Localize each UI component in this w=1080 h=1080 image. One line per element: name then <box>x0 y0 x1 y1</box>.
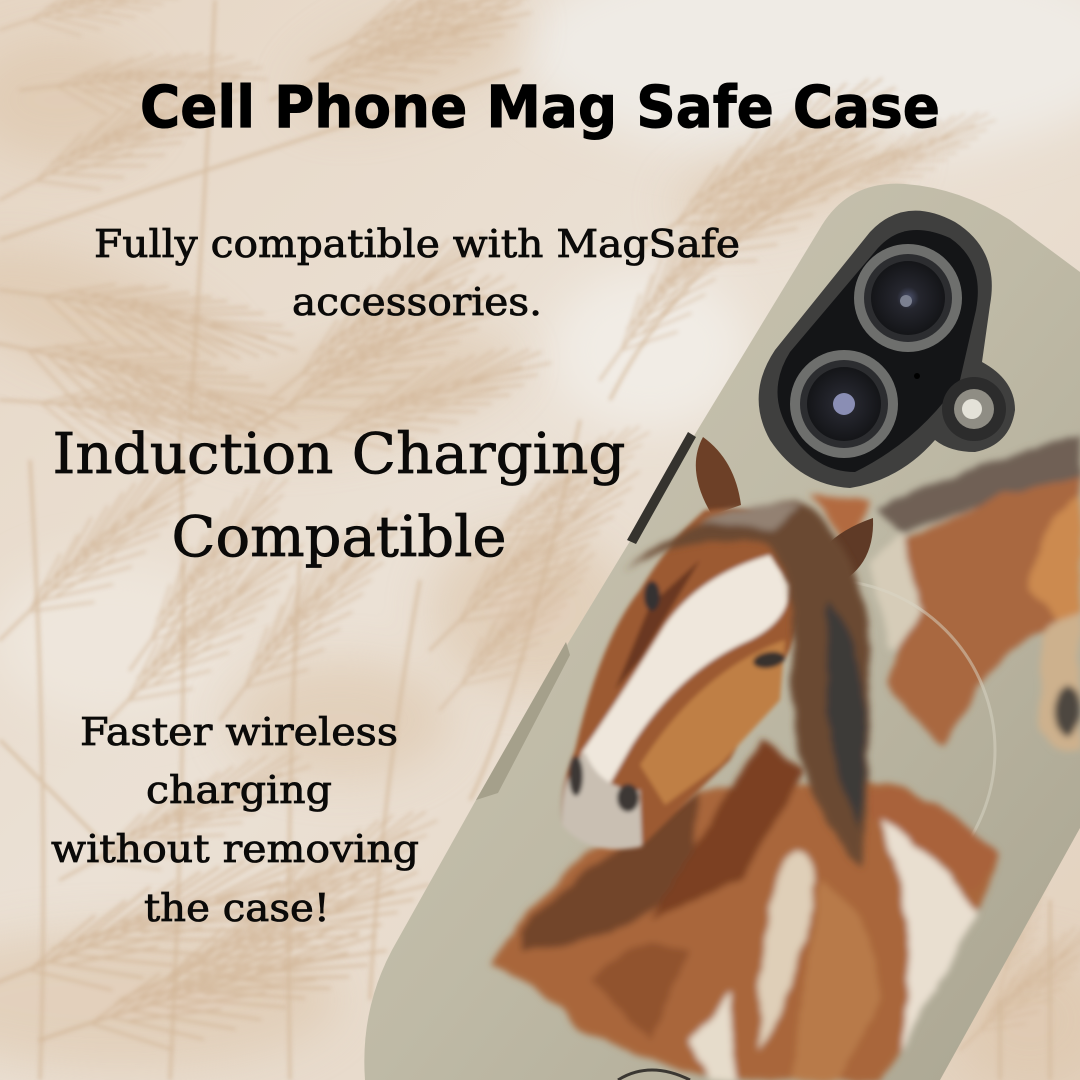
text block: induction charging: Compatible <box>172 505 506 570</box>
case body <box>364 184 1080 1080</box>
text block: MagSafe compatibility: Fully compatible with MagSafe <box>94 222 740 266</box>
lens: lower <box>790 350 898 458</box>
ears <box>696 437 741 515</box>
phone case <box>364 184 1080 1080</box>
magsafe ring <box>655 580 995 920</box>
text block: faster wireless charging <box>51 710 419 930</box>
text block: faster wireless charging: charging <box>146 768 332 812</box>
right horse <box>810 434 1080 752</box>
text block: faster wireless charging: the case! <box>144 886 330 930</box>
magsafe notch <box>618 1070 690 1080</box>
text block: faster wireless charging: Faster wireless <box>80 710 398 754</box>
text block: MagSafe compatibility <box>94 222 740 324</box>
mane <box>625 500 869 870</box>
title: Cell Phone Mag Safe Case <box>140 73 940 141</box>
head <box>561 509 820 849</box>
text block: induction charging: Induction Charging <box>52 422 626 487</box>
left horse <box>490 437 1000 1080</box>
text block: MagSafe compatibility: accessories. <box>292 280 542 324</box>
horse body <box>490 740 1000 1080</box>
text block: induction charging <box>52 422 626 570</box>
lens: upper <box>854 244 962 352</box>
text block: faster wireless charging: without removing <box>51 827 419 871</box>
flash <box>942 377 1006 441</box>
camera island <box>759 211 1015 488</box>
